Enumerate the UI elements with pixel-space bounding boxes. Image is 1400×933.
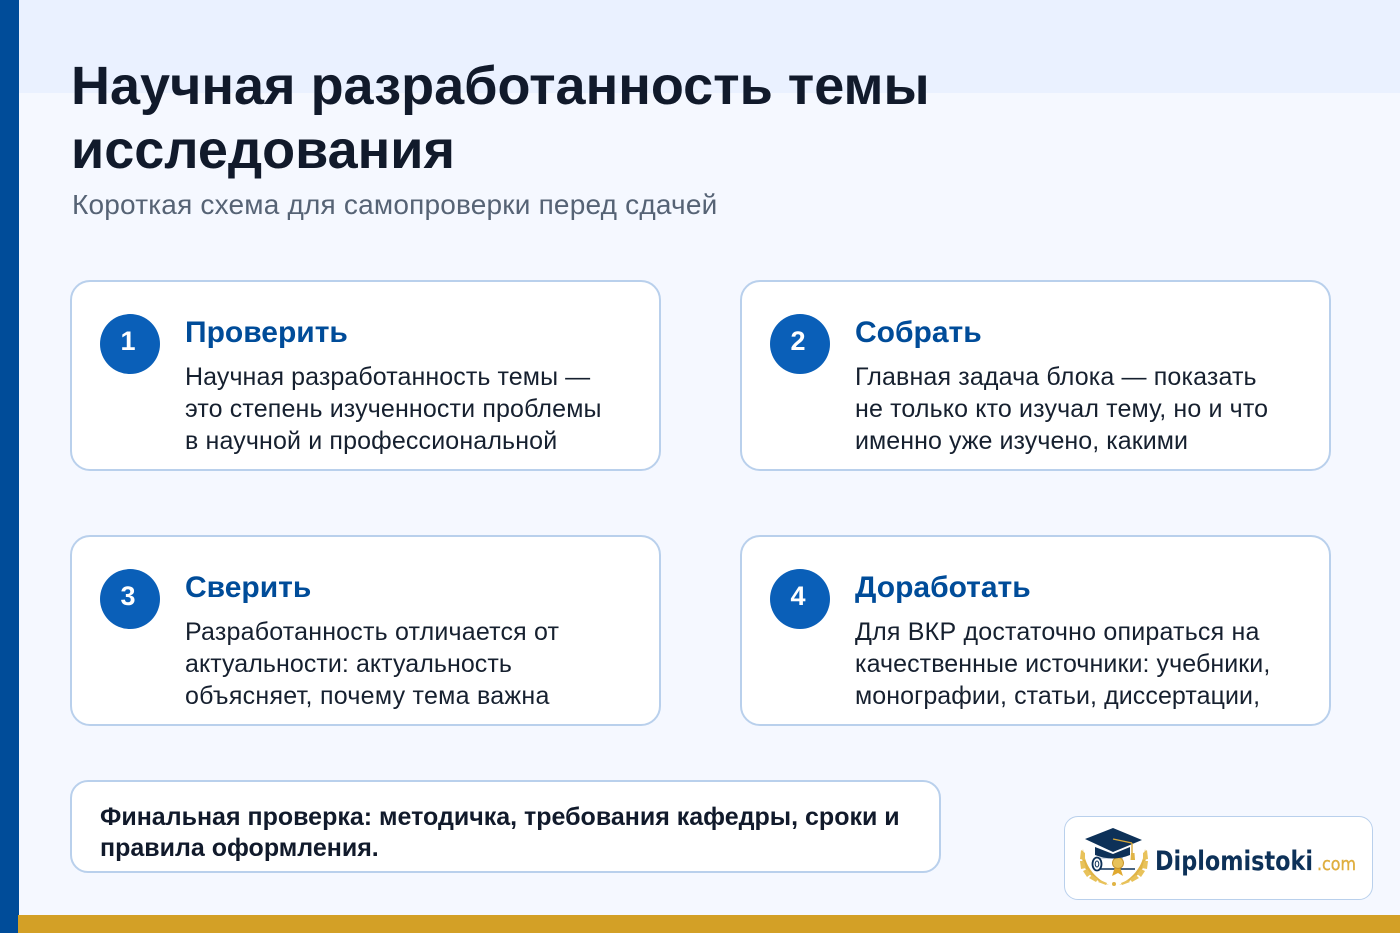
callout: final check: Финальная проверка: методичка, требования кафедры, сроки и [100,803,900,831]
step 1 text: в научной и профессиональной [185,427,557,455]
panel: step 4 [740,535,1331,726]
step 1 text [185,363,602,455]
step 4 text: качественные источники: учебники, [855,650,1270,678]
left accent bar [0,0,19,933]
step 4 number [770,569,830,629]
callout: final check: правила оформления. [100,834,379,862]
callout: final check [70,780,941,873]
step 3 text [185,618,559,710]
step 1 number [100,314,160,374]
title [71,56,930,180]
step 2 text: именно уже изучено, какими [855,427,1188,455]
step 2 heading: Собрать [855,316,982,349]
bottom gold bar [18,915,1400,933]
top header band [0,0,1400,93]
panel: step 3 [70,535,661,726]
step 4 text: Для ВКР достаточно опираться на [855,618,1260,646]
step 4 number: 4 [790,581,806,611]
step 4 text [855,618,1270,710]
title: Научная разработанность темы [71,56,930,116]
step 3 text: актуальности: актуальность [185,650,512,678]
step 3 heading: Сверить [185,571,311,604]
panel: step 2 [740,280,1331,471]
step 2 text [855,363,1268,455]
step 4 heading: Доработать [855,571,1031,604]
step 2 number [770,314,830,374]
step 1 heading: Проверить [185,316,348,349]
step 2 number: 2 [790,326,806,356]
title: исследования [71,120,455,180]
logo: Diplomistoki [1064,816,1373,900]
step 4 text: монографии, статьи, диссертации, [855,682,1260,710]
step 2 text: не только кто изучал тему, но и что [855,395,1268,423]
step 2 text: Главная задача блока — показать [855,363,1257,391]
step 3 number [100,569,160,629]
step 3 text: объясняет, почему тема важна [185,682,550,710]
step 3 number: 3 [120,581,136,611]
icon: graduation cap with laurel [1080,828,1148,886]
step 1 number: 1 [120,326,136,356]
step 1 text: Научная разработанность темы — [185,363,590,391]
subtitle: Короткая схема для самопроверки перед сдачей [72,189,717,220]
logo wordmark: Diplomistoki [1155,846,1313,877]
panel: step 1 [70,280,661,471]
logo domain: .com [1317,854,1356,875]
step 3 text: Разработанность отличается от [185,618,559,646]
step 1 text: это степень изученности проблемы [185,395,602,423]
